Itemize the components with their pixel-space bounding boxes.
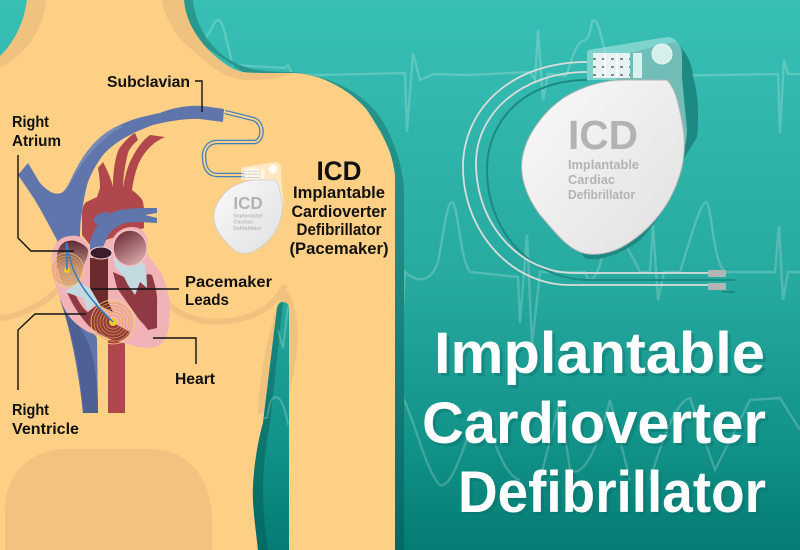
small ICD device: Defibrillator	[233, 226, 262, 232]
ICD heading block: ICD	[316, 156, 362, 186]
labels: Atrium	[12, 133, 61, 150]
device text: ICD	[568, 112, 638, 158]
main title: Cardioverter	[425, 394, 769, 459]
wires	[463, 62, 708, 285]
small ICD device: Implantable	[233, 213, 264, 219]
device text: Defibrillator	[568, 187, 635, 202]
ICD heading block: Cardioverter	[292, 202, 387, 221]
right valve tendons	[65, 282, 108, 315]
vena cava and subclavian	[18, 106, 224, 413]
aorta	[108, 340, 125, 413]
panel: body silhouette	[0, 0, 395, 550]
small ICD device: Cardiac	[233, 220, 254, 226]
pacing target rings	[50, 253, 135, 344]
device body	[522, 80, 684, 254]
abdomen shading	[5, 449, 212, 550]
header port	[652, 44, 672, 64]
main title	[422, 321, 769, 528]
main title: Implantable	[434, 321, 765, 386]
small ICD device	[214, 162, 283, 253]
arm crease shading	[258, 288, 298, 415]
heart diagram	[18, 106, 224, 413]
main title: Implantable	[437, 324, 768, 389]
labels: Ventricle	[12, 421, 79, 438]
left ventricle muscle	[113, 272, 157, 330]
labels: Heart	[175, 371, 216, 388]
band: dark body edge	[180, 0, 404, 550]
device shadow	[570, 42, 698, 259]
labels: Subclavian	[107, 74, 190, 91]
ICD heading block: Defibrillator	[296, 220, 382, 239]
neck shading left	[0, 0, 46, 68]
ECG wave lines	[197, 20, 800, 485]
translucent header	[587, 37, 687, 153]
ICD heading block: Implantable	[293, 183, 385, 202]
pulmonary artery	[90, 208, 157, 250]
left valve tendons	[113, 258, 147, 295]
aortic valve	[90, 247, 112, 259]
labels: Right	[12, 402, 50, 419]
labels: Leads	[185, 292, 229, 309]
device text	[568, 112, 639, 202]
connector block	[593, 53, 642, 78]
arm gap	[253, 302, 289, 550]
large ICD device	[463, 37, 735, 292]
neck shading right	[162, 0, 293, 80]
pacing leads	[66, 243, 113, 322]
right atrium chamber	[57, 240, 88, 287]
connector caps	[708, 270, 726, 277]
device text: Cardiac	[568, 172, 615, 187]
left atrium	[113, 230, 147, 266]
main title: Cardioverter	[422, 391, 766, 456]
small ICD device: ICD	[233, 193, 263, 213]
chest shading	[0, 285, 285, 322]
main title: Defibrillator	[458, 460, 766, 525]
labels: Right	[12, 114, 50, 131]
subclavian lead wires	[204, 112, 262, 175]
wire shadows	[487, 80, 735, 292]
heart wall	[51, 227, 170, 348]
outflow tract	[90, 258, 113, 312]
label lines	[18, 81, 202, 390]
labels: Pacemaker	[185, 274, 272, 291]
main title: Defibrillator	[461, 463, 769, 528]
ICD heading block: (Pacemaker)	[290, 239, 388, 258]
labels	[12, 74, 272, 438]
right ventricle muscle	[67, 292, 130, 342]
ICD heading block	[290, 156, 388, 258]
device text: Implantable	[568, 157, 639, 172]
